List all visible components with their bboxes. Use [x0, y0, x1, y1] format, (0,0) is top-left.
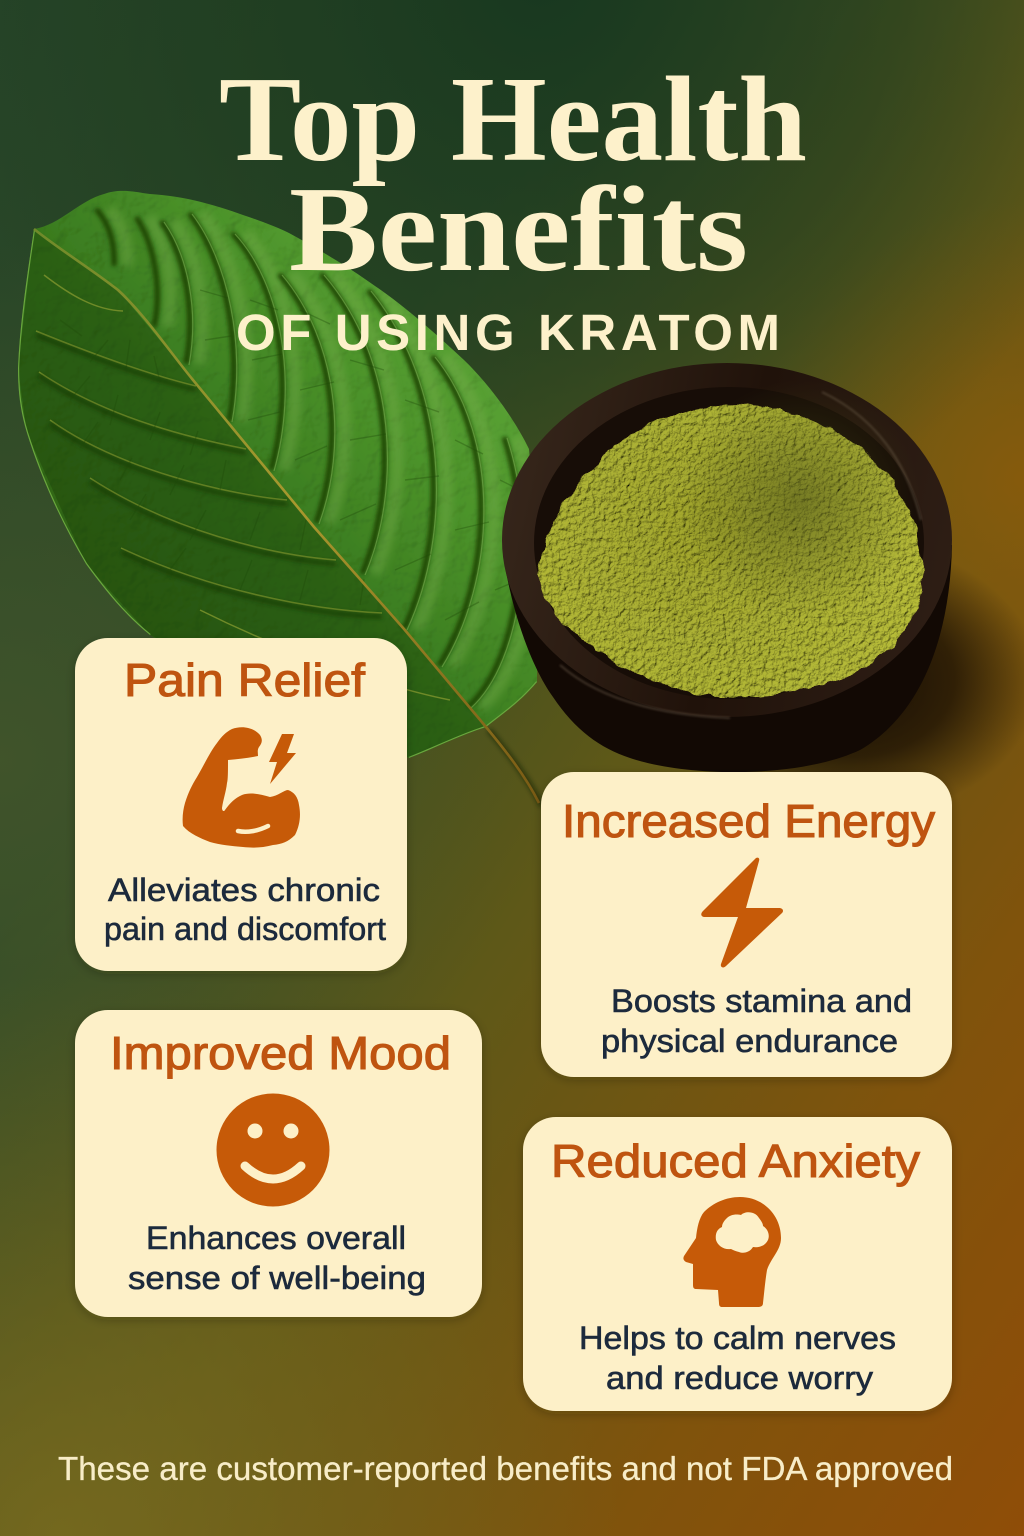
- panel: reduced anxiety: [523, 1117, 952, 1411]
- upper side veins (shadow): [96, 209, 520, 707]
- lobe cross veins: [60, 290, 520, 620]
- body text: improved mood: [128, 1220, 426, 1296]
- panel: pain relief: [75, 638, 407, 971]
- leaf edge lip: [18, 229, 537, 758]
- lower side vein shadows: [36, 335, 382, 617]
- powder: [538, 380, 924, 697]
- heading: improved mood: Improved Mood: [110, 1027, 451, 1079]
- body text: reduced anxiety: [579, 1320, 896, 1396]
- body text: pain relief: [104, 872, 386, 947]
- body text: increased energy: [601, 983, 912, 1059]
- body text: reduced anxiety: and reduce worry: [606, 1360, 873, 1396]
- title: [219, 52, 807, 297]
- lower side veins: [36, 275, 450, 700]
- title: Top Health: [219, 52, 807, 187]
- lower half darkening: [18, 229, 486, 758]
- icon: head with cloud: [683, 1197, 781, 1307]
- icon: smiley face: [216, 1094, 330, 1206]
- heading: increased energy: Increased Energy: [562, 795, 935, 847]
- footer disclaimer: These are customer-reported benefits and not FDA approved: [58, 1450, 953, 1487]
- body text: pain relief: pain and discomfort: [104, 911, 386, 947]
- subtitle: OF USING KRATOM: [236, 304, 780, 361]
- leaf illustration: [0, 180, 560, 806]
- icon: flexed arm with bolt: [183, 727, 300, 848]
- rim highlights: [560, 392, 921, 718]
- body text: increased energy: Boosts stamina and: [611, 983, 912, 1019]
- heading: pain relief: Pain Relief: [124, 654, 365, 706]
- bowl shadow: [660, 540, 1024, 820]
- body text: reduced anxiety: Helps to calm nerves: [579, 1320, 896, 1356]
- bowl rim: [502, 363, 952, 717]
- bowl with powder: [502, 363, 952, 772]
- inner bowl wall: [534, 387, 924, 699]
- panel: increased energy: [541, 772, 952, 1077]
- upper side veins (highlights): [164, 214, 523, 708]
- title: Benefits: [289, 162, 748, 297]
- upper side lobe highlights: [109, 209, 533, 707]
- panel: improved mood: [75, 1010, 482, 1317]
- body text: improved mood: Enhances overall: [146, 1220, 406, 1256]
- midrib and stem: [34, 229, 539, 803]
- icon: lightning bolt: [701, 858, 783, 967]
- body text: pain relief: Alleviates chronic: [108, 872, 380, 908]
- body text: improved mood: sense of well-being: [128, 1260, 426, 1296]
- body text: increased energy: physical endurance: [601, 1023, 898, 1059]
- bowl body: [504, 545, 952, 772]
- heading: reduced anxiety: Reduced Anxiety: [551, 1135, 920, 1187]
